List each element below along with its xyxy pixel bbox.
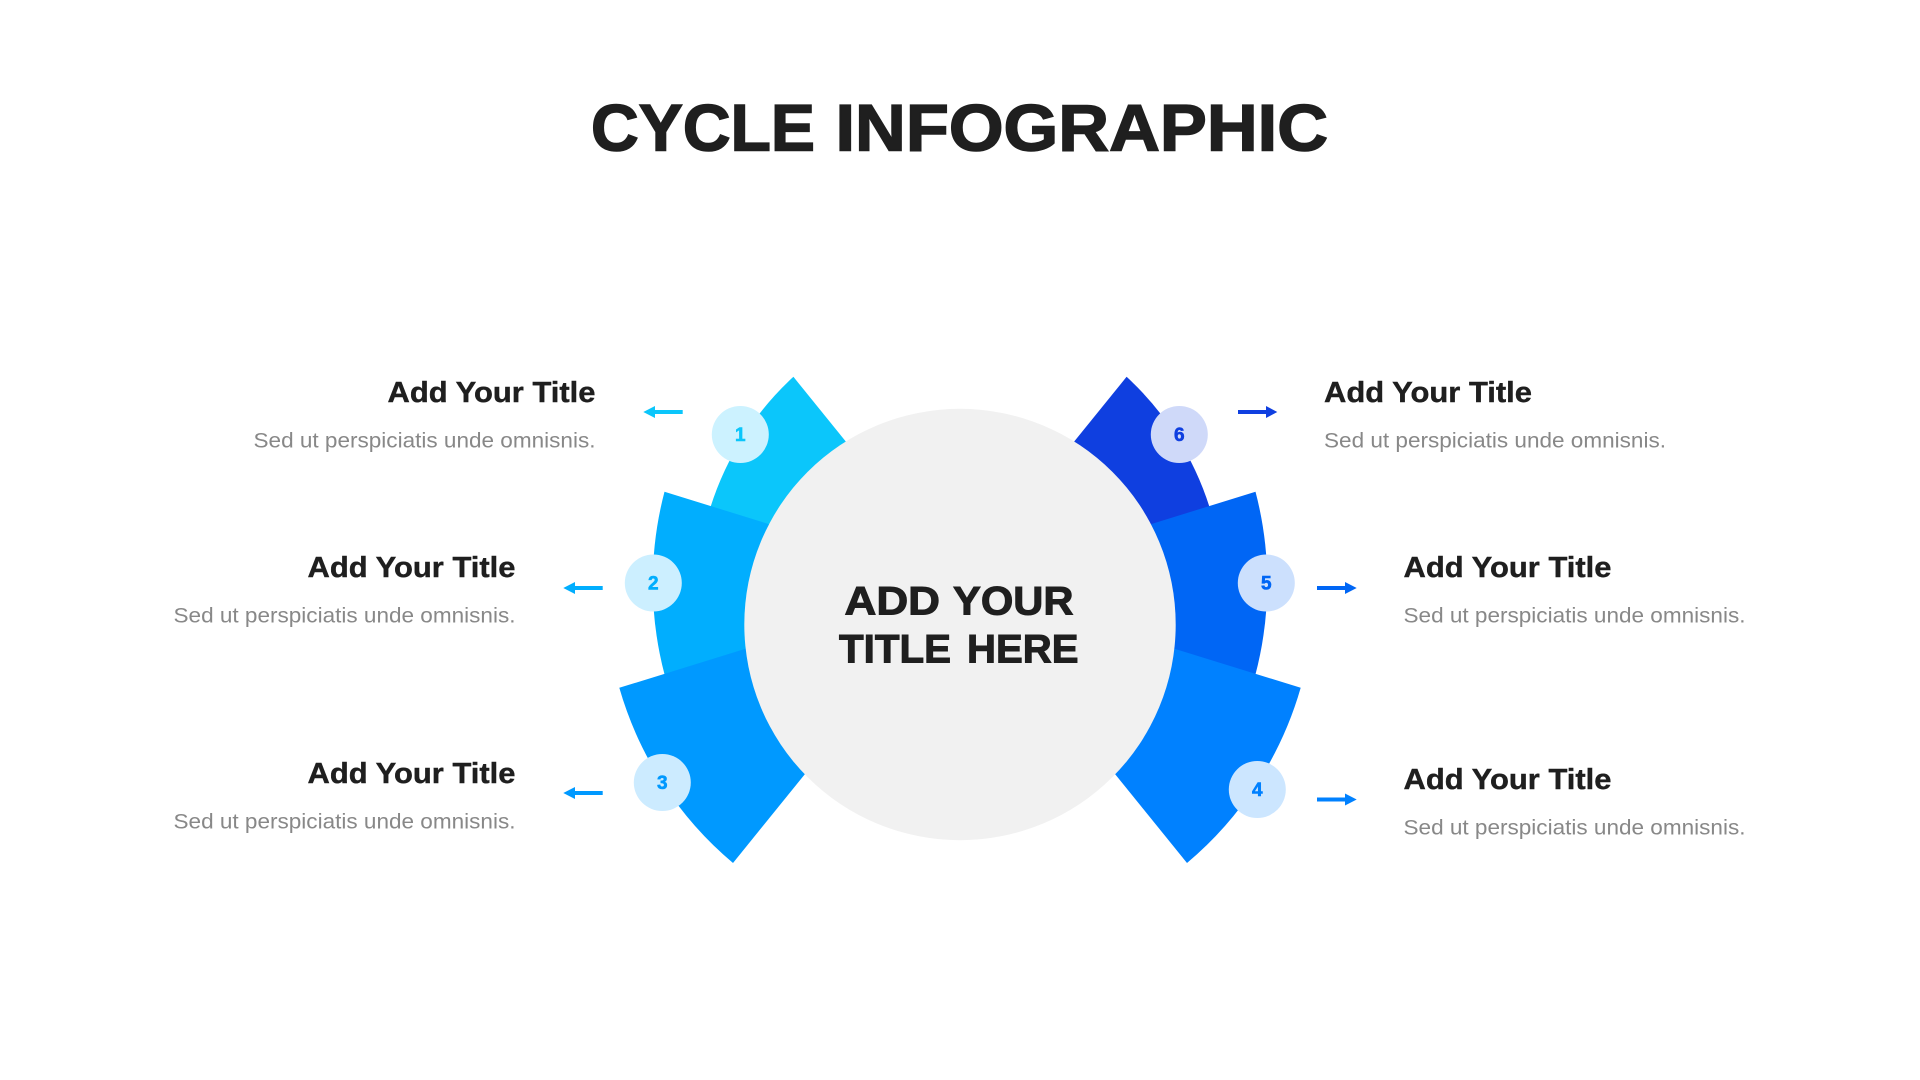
text block 1: Sed ut perspiciatis unde omnisnis. — [254, 430, 596, 452]
text block 2 — [174, 552, 516, 628]
arrow 5 — [1317, 582, 1357, 594]
text block 3 — [174, 758, 516, 834]
badge 3: 3 — [657, 773, 668, 794]
badge 2: 2 — [648, 574, 659, 594]
cycle diagram — [619, 377, 1301, 863]
text block 3: Sed ut perspiciatis unde omnisnis. — [174, 810, 516, 834]
text block 6: Sed ut perspiciatis unde omnisnis. — [1324, 430, 1666, 452]
badge 5: 5 — [1261, 574, 1272, 594]
badge 4: 4 — [1252, 780, 1263, 801]
text block 5: Add Your Title — [1404, 552, 1612, 584]
text block 6 — [1324, 377, 1666, 452]
text block 3: Add Your Title — [308, 758, 516, 790]
badge 5 — [1238, 554, 1295, 612]
title — [591, 90, 1328, 164]
center circle — [744, 409, 1176, 840]
badge 6 — [1151, 406, 1208, 463]
arrow 6 — [1238, 406, 1277, 418]
badge 4 — [1229, 761, 1286, 818]
center title: HERE — [967, 627, 1078, 671]
text block 5: Sed ut perspiciatis unde omnisnis. — [1404, 604, 1746, 628]
segment 5 — [960, 492, 1267, 674]
badge 2 — [625, 554, 682, 612]
badge 1: 1 — [735, 425, 746, 446]
text block 4: Add Your Title — [1404, 764, 1612, 796]
arrow 4 — [1317, 794, 1357, 806]
text block 1: Add Your Title — [388, 377, 596, 409]
segment 4 — [960, 582, 1301, 863]
badge 6: 6 — [1174, 425, 1185, 446]
arrow 2 — [563, 582, 603, 594]
text block 2: Sed ut perspiciatis unde omnisnis. — [174, 604, 516, 628]
arrow 3 — [563, 787, 603, 799]
center title — [839, 579, 1078, 671]
text block 5 — [1404, 552, 1746, 628]
text block 4 — [1404, 764, 1746, 840]
arrow 1 — [643, 406, 683, 418]
center title: YOUR — [953, 579, 1074, 623]
badge 1 — [712, 406, 769, 463]
text block 4: Sed ut perspiciatis unde omnisnis. — [1404, 816, 1746, 840]
title: CYCLE — [591, 90, 815, 164]
title: INFOGRAPHIC — [836, 90, 1328, 164]
text block 1 — [254, 377, 596, 452]
text block 2: Add Your Title — [308, 552, 516, 584]
center title: ADD — [844, 579, 940, 623]
segment 2 — [653, 492, 960, 674]
badge 3 — [634, 754, 691, 811]
segment 6 — [960, 377, 1210, 582]
segment 3 — [619, 582, 960, 863]
segment 1 — [710, 377, 960, 582]
text block 6: Add Your Title — [1324, 377, 1532, 409]
center title: TITLE — [839, 627, 951, 671]
